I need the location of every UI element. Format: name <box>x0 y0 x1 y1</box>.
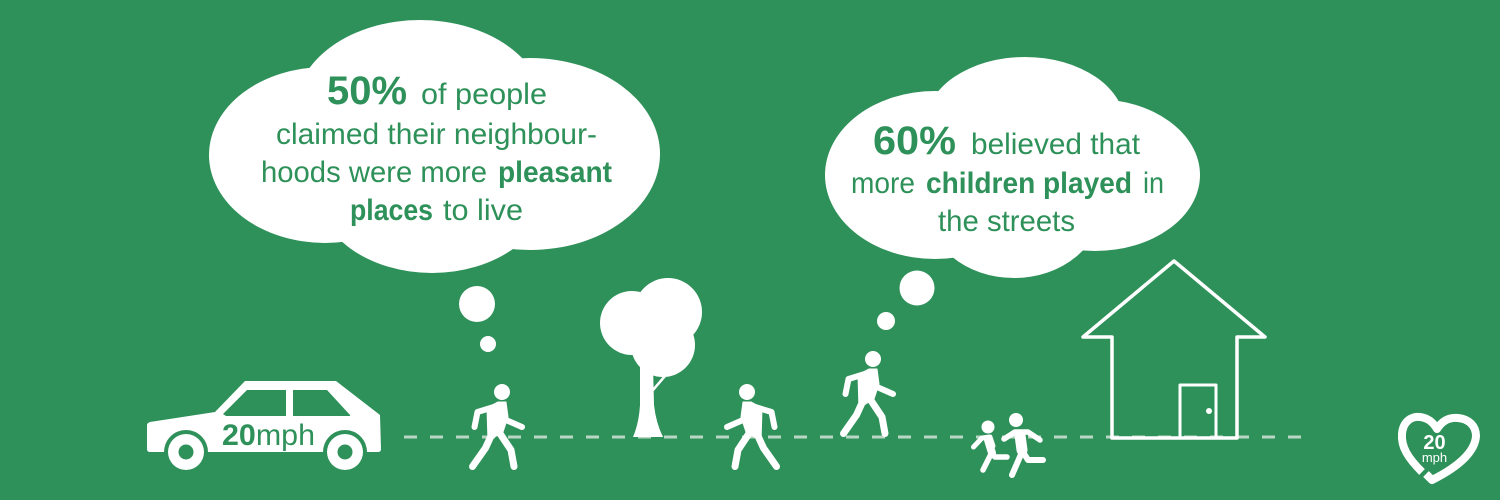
logo: 20 mph heart <box>1402 417 1476 480</box>
thought cloud: 50% pleasant places: of people <box>421 78 547 111</box>
logo: 20 mph heart: 20 <box>1423 432 1446 454</box>
thought bubbles: third walker <box>877 270 934 330</box>
icon: car with 20mph: 20mph <box>222 419 315 452</box>
thought cloud: 50% pleasant places: 50% <box>327 69 407 113</box>
thought cloud: 60% children played: the streets <box>938 205 1075 238</box>
thought cloud: 60% children played: believed that <box>971 128 1141 161</box>
thought cloud: 50% pleasant places: claimed their neighbour- <box>276 118 597 151</box>
thought cloud: 60% children played: more <box>851 167 915 200</box>
icon: walking person 2 <box>727 384 776 466</box>
thought cloud: 60% children played: children played <box>926 167 1132 200</box>
thought cloud: 50% pleasant places: to live <box>443 194 523 227</box>
icon: walking person 1 <box>472 384 522 466</box>
thought cloud: 50% pleasant places <box>209 20 660 273</box>
logo: 20 mph heart: mph <box>1422 450 1447 465</box>
icon: house outline <box>1083 261 1265 438</box>
icon: walking person 3 <box>844 351 893 434</box>
road dashed line <box>404 436 1302 438</box>
thought bubbles: first walker <box>459 286 496 352</box>
thought cloud: 60% children played <box>825 57 1200 278</box>
thought cloud: 60% children played: 60% <box>873 119 956 163</box>
icon: tree <box>600 278 702 437</box>
thought cloud: 50% pleasant places: pleasant <box>498 156 612 189</box>
icon: two running children <box>974 413 1043 475</box>
icon: car with 20mph <box>147 381 381 476</box>
thought cloud: 50% pleasant places: places <box>350 194 433 227</box>
thought cloud: 50% pleasant places: hoods were more <box>261 156 487 189</box>
thought cloud: 60% children played: in <box>1143 167 1164 200</box>
